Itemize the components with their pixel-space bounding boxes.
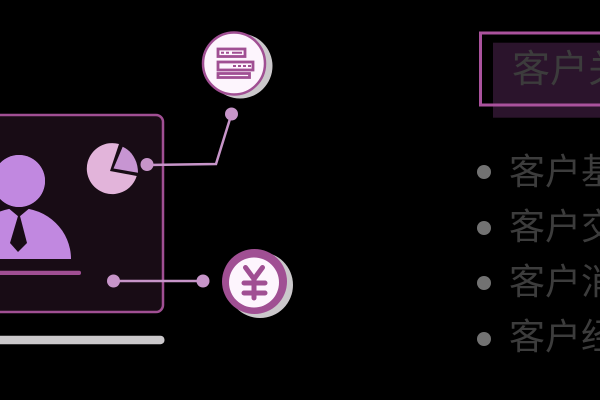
panel: screen (0, 115, 163, 312)
icon: yen badge (222, 249, 293, 318)
connector: pie chart to server icon (140, 108, 238, 171)
title backing panel (493, 43, 600, 118)
bullet list (477, 151, 600, 357)
connector: screen to yen icon (107, 274, 210, 288)
bar: screen base (0, 336, 164, 344)
icon: pie chart (87, 143, 138, 194)
icon: server badge (203, 32, 272, 98)
title frame (480, 33, 600, 105)
icon: person (0, 155, 71, 259)
bar: name underline (0, 271, 81, 275)
